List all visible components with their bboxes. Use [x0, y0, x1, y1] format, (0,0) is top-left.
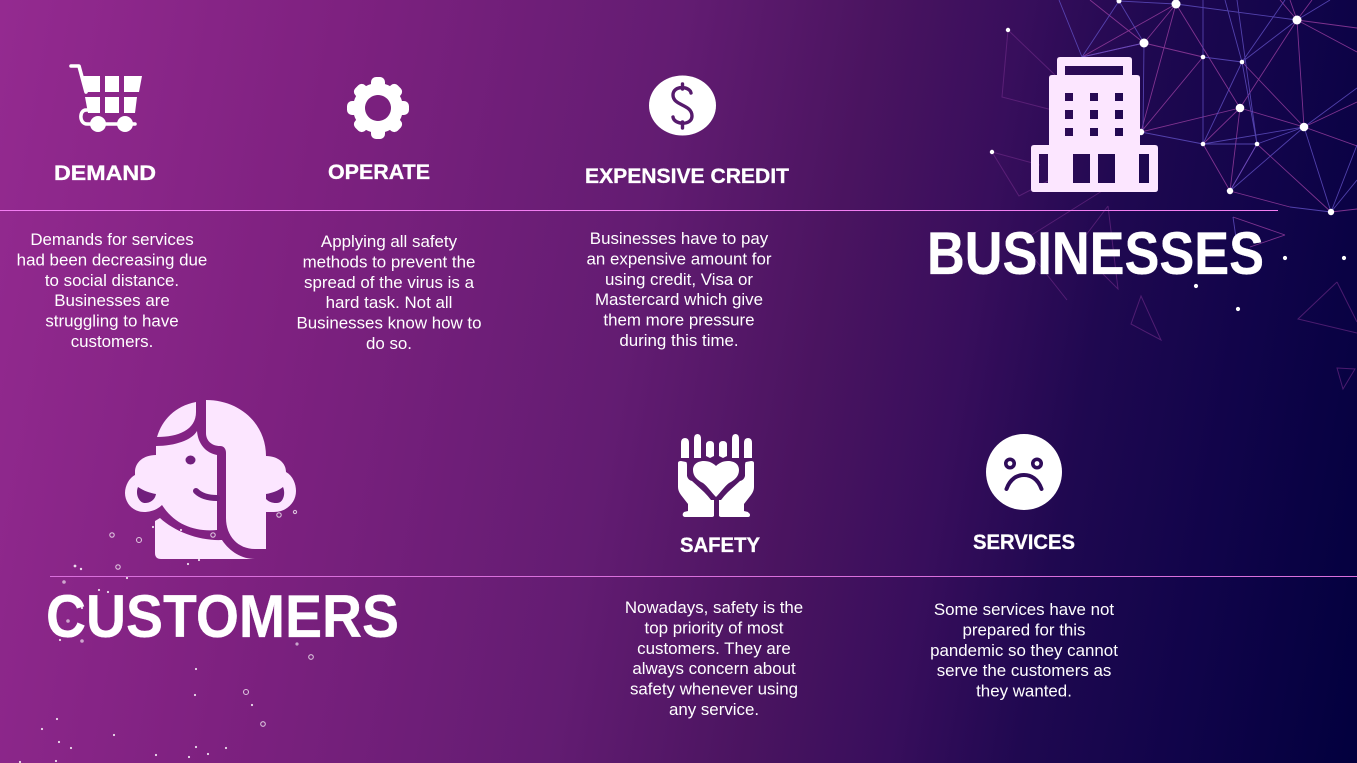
- text: demand: customers.: [71, 332, 153, 351]
- text: operate: methods to prevent the: [303, 252, 475, 271]
- network decoration: [990, 0, 1357, 389]
- text: demand: Demands for services: [30, 230, 194, 249]
- text: services: prepared for this: [962, 620, 1086, 639]
- panel: services: [930, 434, 1118, 701]
- text: expensive credit: an expensive amount for: [587, 249, 772, 268]
- divider: bottom: [50, 576, 1357, 577]
- heading: customers: CUSTOMERS: [46, 583, 399, 650]
- text: operate: hard task. Not all: [326, 293, 452, 312]
- text: expensive credit: during this time.: [619, 331, 739, 350]
- text: operate: Applying all safety: [321, 232, 458, 251]
- text: expensive credit: using credit, Visa or: [605, 270, 753, 289]
- particle decoration: [19, 510, 313, 763]
- icon: shopping cart: [71, 66, 142, 132]
- heading: businesses: BUSINESSES: [927, 220, 1264, 287]
- text: expensive credit: them more pressure: [603, 311, 755, 330]
- text: safety: top priority of most: [645, 618, 784, 637]
- text: expensive credit: Mastercard which give: [595, 290, 763, 309]
- icon: dollar coin: [649, 76, 716, 136]
- heading: operate: OPERATE: [328, 160, 430, 184]
- text: services: they wanted.: [976, 682, 1072, 701]
- text: safety: customers. They are: [637, 639, 791, 658]
- text: demand: had been decreasing due: [17, 250, 207, 269]
- icon: sad face: [986, 434, 1062, 510]
- icon: hands holding heart: [678, 434, 754, 517]
- text: safety: safety whenever using: [630, 680, 798, 699]
- panel: demand: [17, 66, 207, 351]
- text: safety: always concern about: [632, 659, 796, 678]
- heading: expensive credit: EXPENSIVE CREDIT: [585, 164, 789, 188]
- text: operate: spread of the virus is a: [304, 273, 475, 292]
- text: demand: to social distance.: [45, 271, 179, 290]
- panel: safety: [625, 434, 803, 719]
- text: safety: Nowadays, safety is the: [625, 598, 803, 617]
- text: demand: Businesses are: [54, 291, 170, 310]
- divider: top: [0, 210, 1278, 211]
- heading: safety: SAFETY: [680, 533, 760, 557]
- text: operate: Businesses know how to: [297, 314, 481, 333]
- text: safety: any service.: [669, 700, 759, 719]
- text: operate: do so.: [366, 334, 412, 353]
- panel: customers: [46, 400, 399, 650]
- text: services: Some services have not: [934, 600, 1114, 619]
- icon: customer head: [125, 400, 296, 559]
- icon: office building: [1031, 57, 1158, 192]
- heading: services: SERVICES: [973, 530, 1075, 554]
- text: services: serve the customers as: [937, 661, 1111, 680]
- text: expensive credit: Businesses have to pay: [590, 229, 769, 248]
- panel: businesses: [927, 57, 1264, 287]
- text: demand: struggling to have: [45, 312, 179, 331]
- text: services: pandemic so they cannot: [930, 641, 1118, 660]
- icon: gear: [347, 77, 409, 139]
- heading: demand: DEMAND: [54, 161, 156, 185]
- panel: operate: [297, 77, 481, 353]
- panel: expensive credit: [585, 76, 789, 350]
